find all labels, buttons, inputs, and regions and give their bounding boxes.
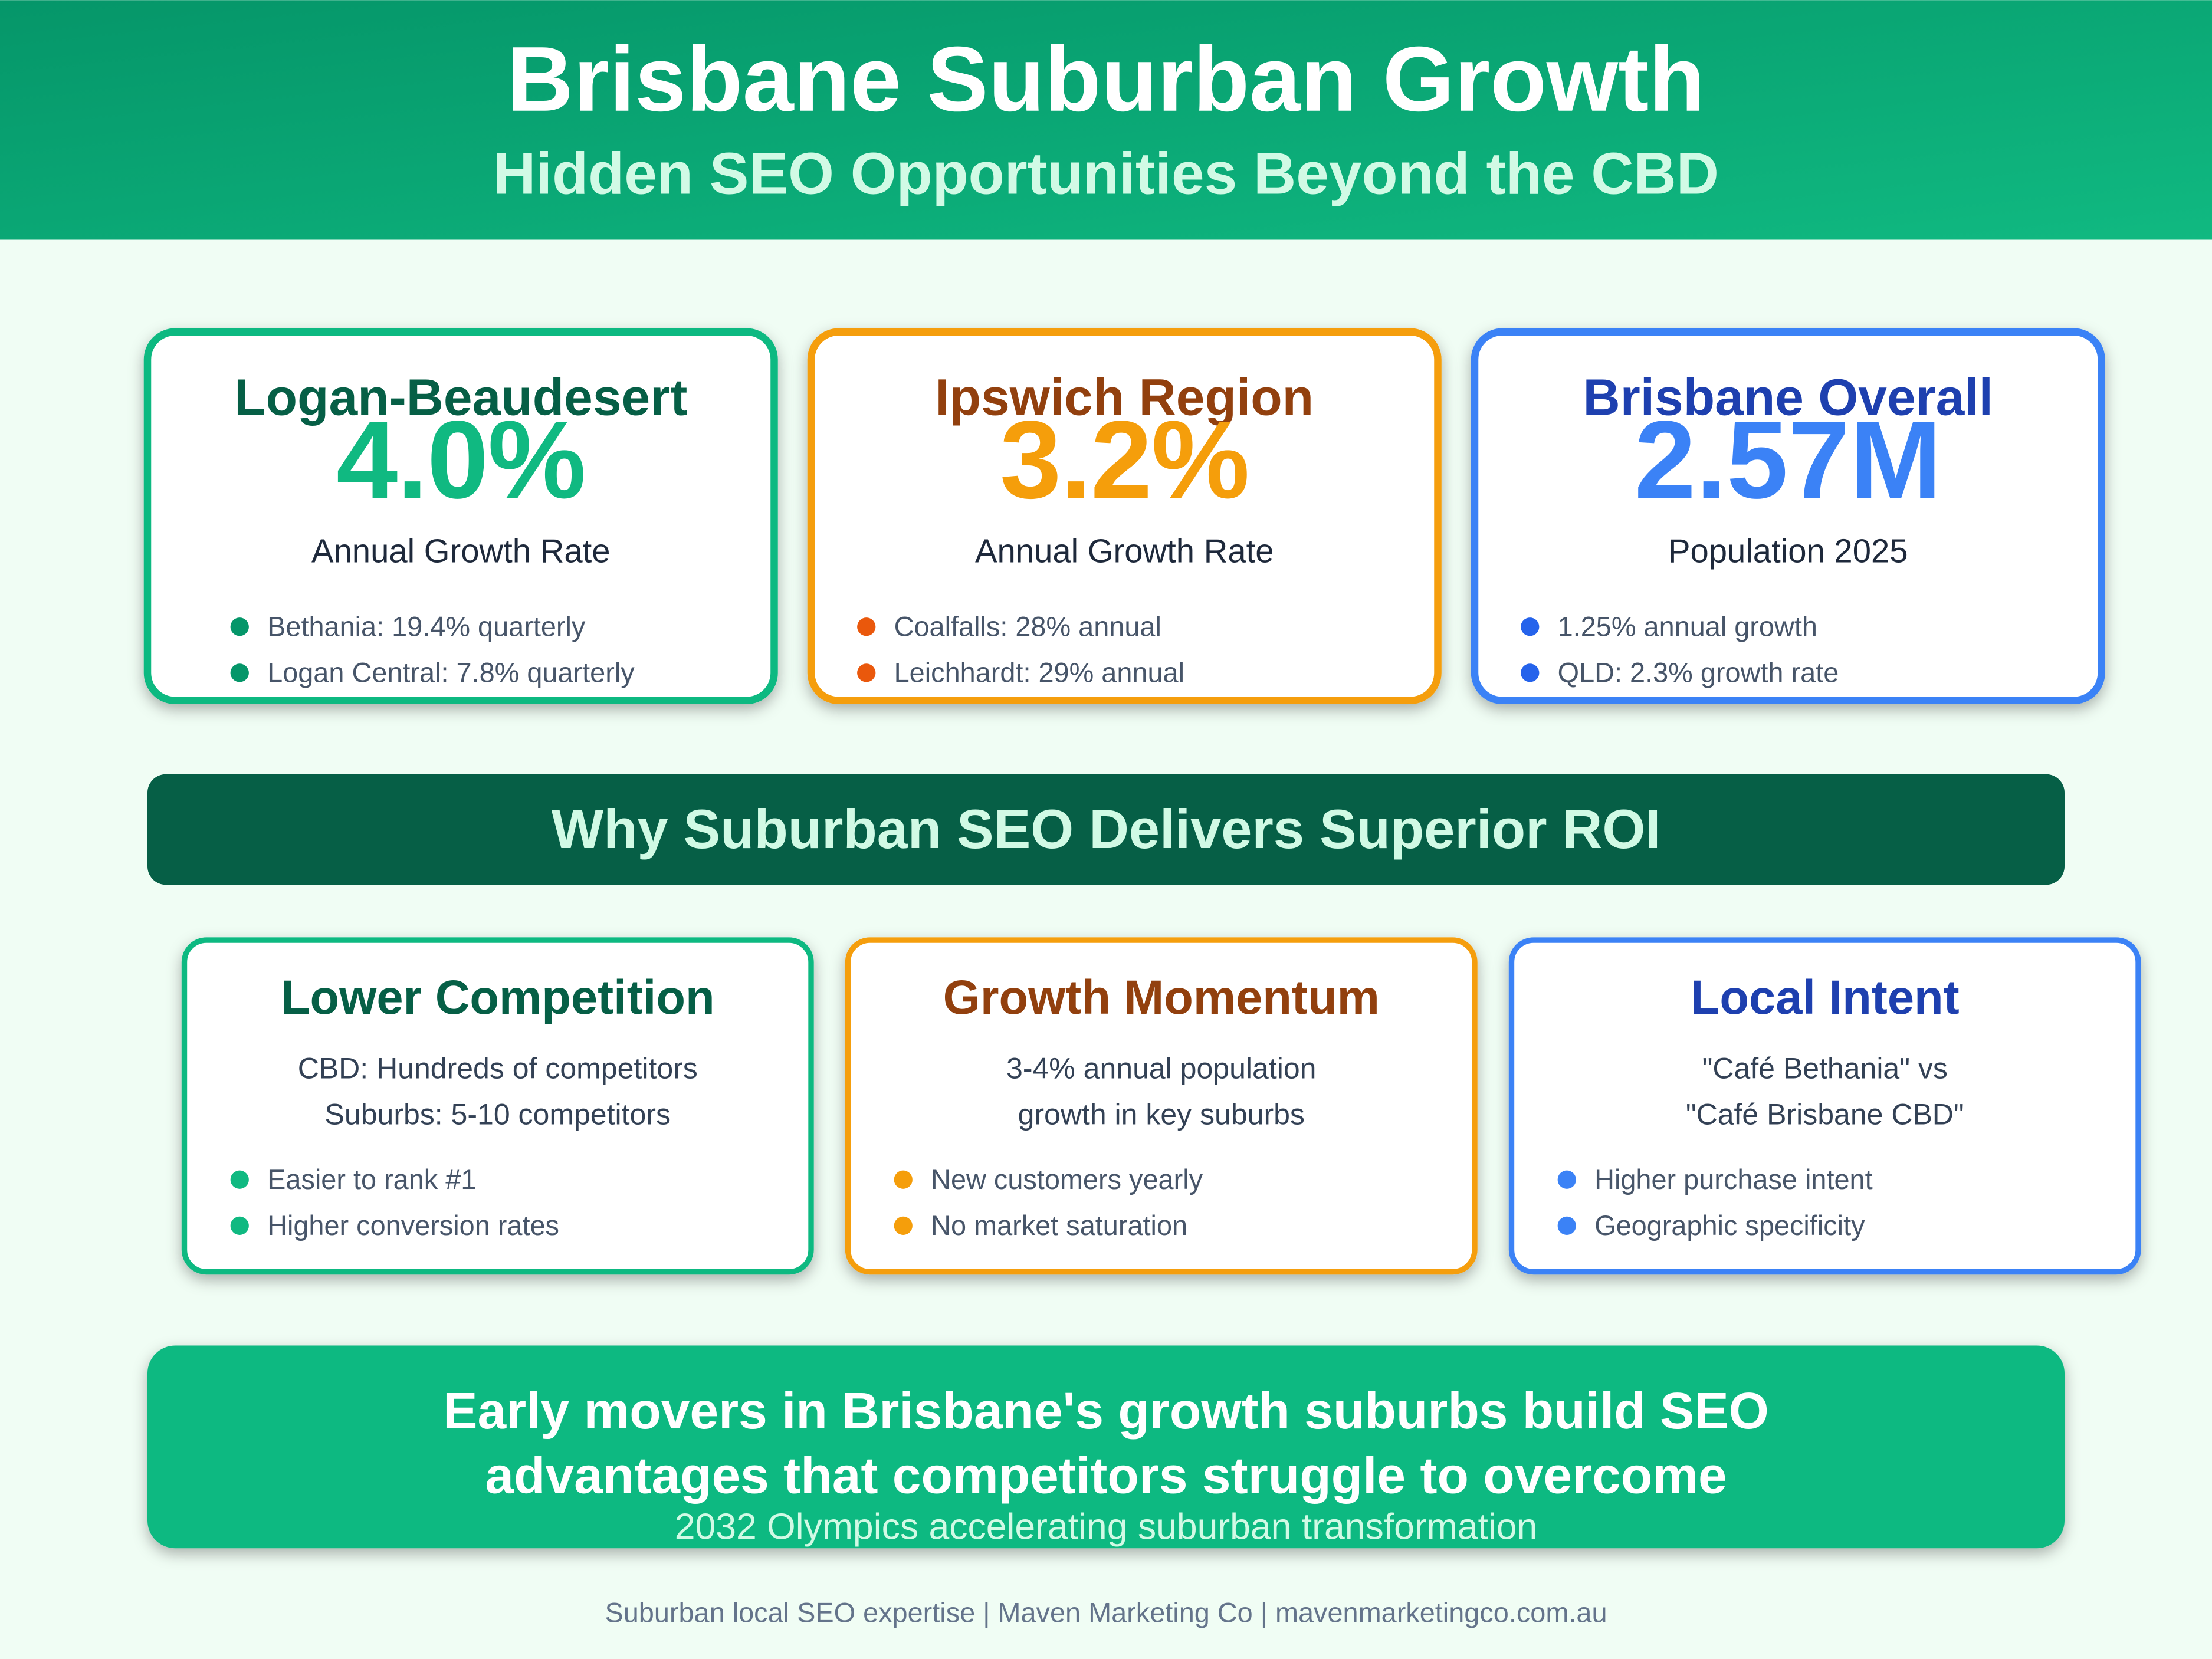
stat: 4.0% <box>336 397 585 521</box>
description: 3-4% annual population <box>1006 1052 1316 1085</box>
bullet list: Higher conversion rates <box>267 1210 559 1241</box>
callout message: Early movers in Brisbane's growth suburbs build SEO <box>443 1382 1769 1440</box>
panel: Ipswich Region <box>811 332 1438 701</box>
bullet list: QLD: 2.3% growth rate <box>1558 657 1839 688</box>
bullet list <box>1521 611 1839 688</box>
panel: Growth Momentum <box>848 940 1475 1272</box>
bullet list: Easier to rank #1 <box>267 1164 476 1195</box>
bullet list <box>894 1164 1203 1241</box>
heading: Logan-Beaudesert <box>234 368 687 426</box>
description <box>298 1052 698 1131</box>
stat label: Annual Growth Rate <box>975 532 1274 569</box>
bullet list: Bethania: 19.4% quarterly <box>267 611 586 642</box>
footer: Suburban local SEO expertise | Maven Marketing Co | mavenmarketingco.com.au <box>605 1597 1607 1628</box>
panel: Local Intent <box>1511 940 2138 1272</box>
callout note: 2032 Olympics accelerating suburban transformation <box>675 1506 1537 1548</box>
panel: Logan-Beaudesert <box>147 332 774 701</box>
description: "Café Brisbane CBD" <box>1686 1098 1964 1131</box>
section banner <box>147 774 2065 885</box>
description: "Café Bethania" vs <box>1702 1052 1948 1085</box>
stat: 2.57M <box>1635 397 1942 521</box>
bullet list: Coalfalls: 28% annual <box>894 611 1161 642</box>
heading: Growth Momentum <box>943 971 1380 1024</box>
stat: 3.2% <box>1000 397 1249 521</box>
callout <box>147 1346 2065 1548</box>
bullet list: Leichhardt: 29% annual <box>894 657 1184 688</box>
callout message <box>443 1382 1769 1504</box>
description: CBD: Hundreds of competitors <box>298 1052 698 1085</box>
heading: Ipswich Region <box>935 368 1314 426</box>
title: Brisbane Suburban Growth <box>507 28 1705 131</box>
bullet list <box>231 611 635 688</box>
subtitle: Hidden SEO Opportunities Beyond the CBD <box>493 140 1719 206</box>
banner heading: Why Suburban SEO Delivers Superior ROI <box>552 798 1660 860</box>
heading: Brisbane Overall <box>1583 368 1993 426</box>
stat label: Annual Growth Rate <box>311 532 611 569</box>
panel: Lower Competition <box>184 940 811 1272</box>
bullet list <box>1558 1164 1873 1241</box>
stat label: Population 2025 <box>1668 532 1908 569</box>
callout message: advantages that competitors struggle to overcome <box>485 1446 1727 1504</box>
bullet list: Logan Central: 7.8% quarterly <box>267 657 635 688</box>
panel: Brisbane Overall <box>1475 332 2101 701</box>
description <box>1006 1052 1316 1131</box>
bullet list <box>857 611 1184 688</box>
bullet list: No market saturation <box>931 1210 1187 1241</box>
description: growth in key suburbs <box>1018 1098 1305 1131</box>
bullet list: New customers yearly <box>931 1164 1203 1195</box>
bullet list <box>231 1164 559 1241</box>
description <box>1686 1052 1964 1131</box>
heading: Lower Competition <box>281 971 715 1024</box>
header <box>0 0 2212 239</box>
description: Suburbs: 5-10 competitors <box>325 1098 671 1131</box>
bullet list: Higher purchase intent <box>1594 1164 1873 1195</box>
bullet list: Geographic specificity <box>1594 1210 1865 1241</box>
heading: Local Intent <box>1691 971 1960 1024</box>
bullet list: 1.25% annual growth <box>1558 611 1817 642</box>
